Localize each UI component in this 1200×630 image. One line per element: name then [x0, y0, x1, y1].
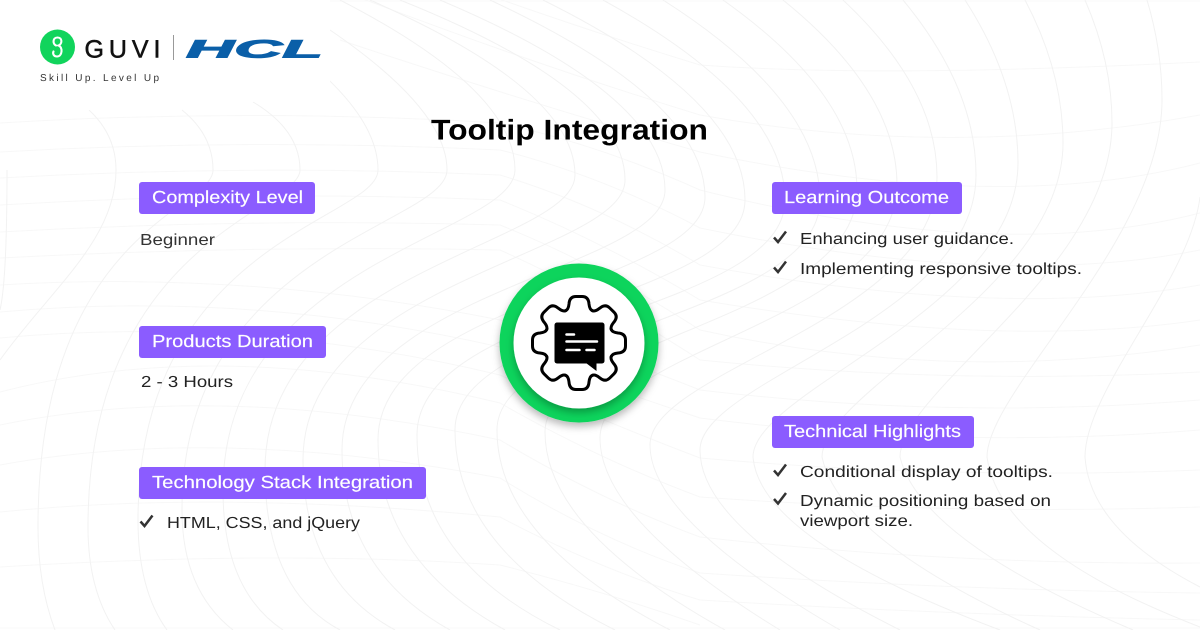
badge: Technology Stack Integration: Technology Stack Integration [152, 472, 413, 492]
text: highlight two: Dynamic positioning based on [800, 493, 1051, 510]
panel: learning outcome [772, 182, 1082, 278]
badge: Learning Outcome [772, 182, 962, 214]
panel: products duration [139, 326, 326, 391]
green ring [500, 264, 658, 422]
text: highlight two: viewport size. [800, 513, 913, 530]
GUVI wordmark: GUVI [84, 36, 160, 64]
badge: Technology Stack Integration [139, 467, 426, 499]
text: highlight two [800, 493, 1051, 530]
icon: GUVI green circle [40, 30, 75, 64]
gear outline [532, 296, 626, 390]
text: highlight one: Conditional display of tooltips. [800, 464, 1053, 481]
panel: technical highlights [772, 416, 1053, 530]
tagline: Skill Up. Level Up [40, 73, 159, 84]
badge: Complexity Level: Complexity Level [152, 187, 303, 207]
text: stack: HTML, CSS, and jQuery [167, 515, 360, 532]
central icon: gear with speech bubble [500, 264, 658, 422]
badge: Technical Highlights: Technical Highlights [784, 421, 961, 441]
text: Beginner: Beginner [140, 232, 216, 249]
speech bubble [554, 322, 604, 371]
text: duration: 2 - 3 Hours [141, 374, 233, 391]
badge: Learning Outcome: Learning Outcome [784, 187, 949, 207]
badge: Products Duration: Products Duration [152, 331, 313, 351]
icon: check [140, 516, 152, 526]
icon: check [774, 232, 786, 242]
text: outcome two: Implementing responsive tooltips. [800, 261, 1082, 278]
icon: check [774, 464, 786, 475]
badge: Products Duration [139, 326, 326, 358]
badge: Technical Highlights [772, 416, 974, 448]
icon: check [774, 493, 786, 504]
text: outcome one: Enhancing user guidance. [800, 231, 1014, 248]
panel: technology stack integration [139, 467, 426, 532]
HCL wordmark: HCL [186, 35, 323, 63]
panel: complexity level [139, 182, 315, 249]
badge: Complexity Level [139, 182, 315, 214]
logo: GUVI and HCL [40, 30, 323, 84]
title: Tooltip Integration [431, 114, 708, 146]
icon: check [774, 262, 786, 272]
white inner disc [514, 278, 644, 408]
